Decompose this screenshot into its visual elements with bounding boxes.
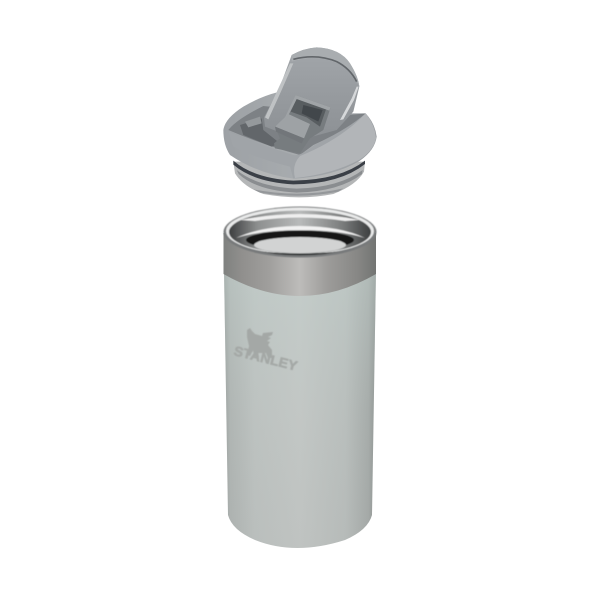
lid flap [264, 47, 359, 140]
tumbler body [224, 270, 376, 548]
tumbler [224, 206, 376, 548]
logo: bear [247, 328, 273, 358]
logo [232, 328, 299, 374]
lid recess [228, 106, 366, 155]
lid flap side edges [265, 63, 293, 119]
logo: wordmark: STANLEY [232, 343, 299, 374]
tumbler mouth [224, 206, 376, 258]
lid threads [233, 161, 365, 197]
lid latch [274, 95, 331, 153]
steel collar [224, 233, 376, 296]
lid [223, 47, 377, 197]
lid front lip highlight [228, 113, 376, 179]
lid rim [223, 92, 377, 179]
